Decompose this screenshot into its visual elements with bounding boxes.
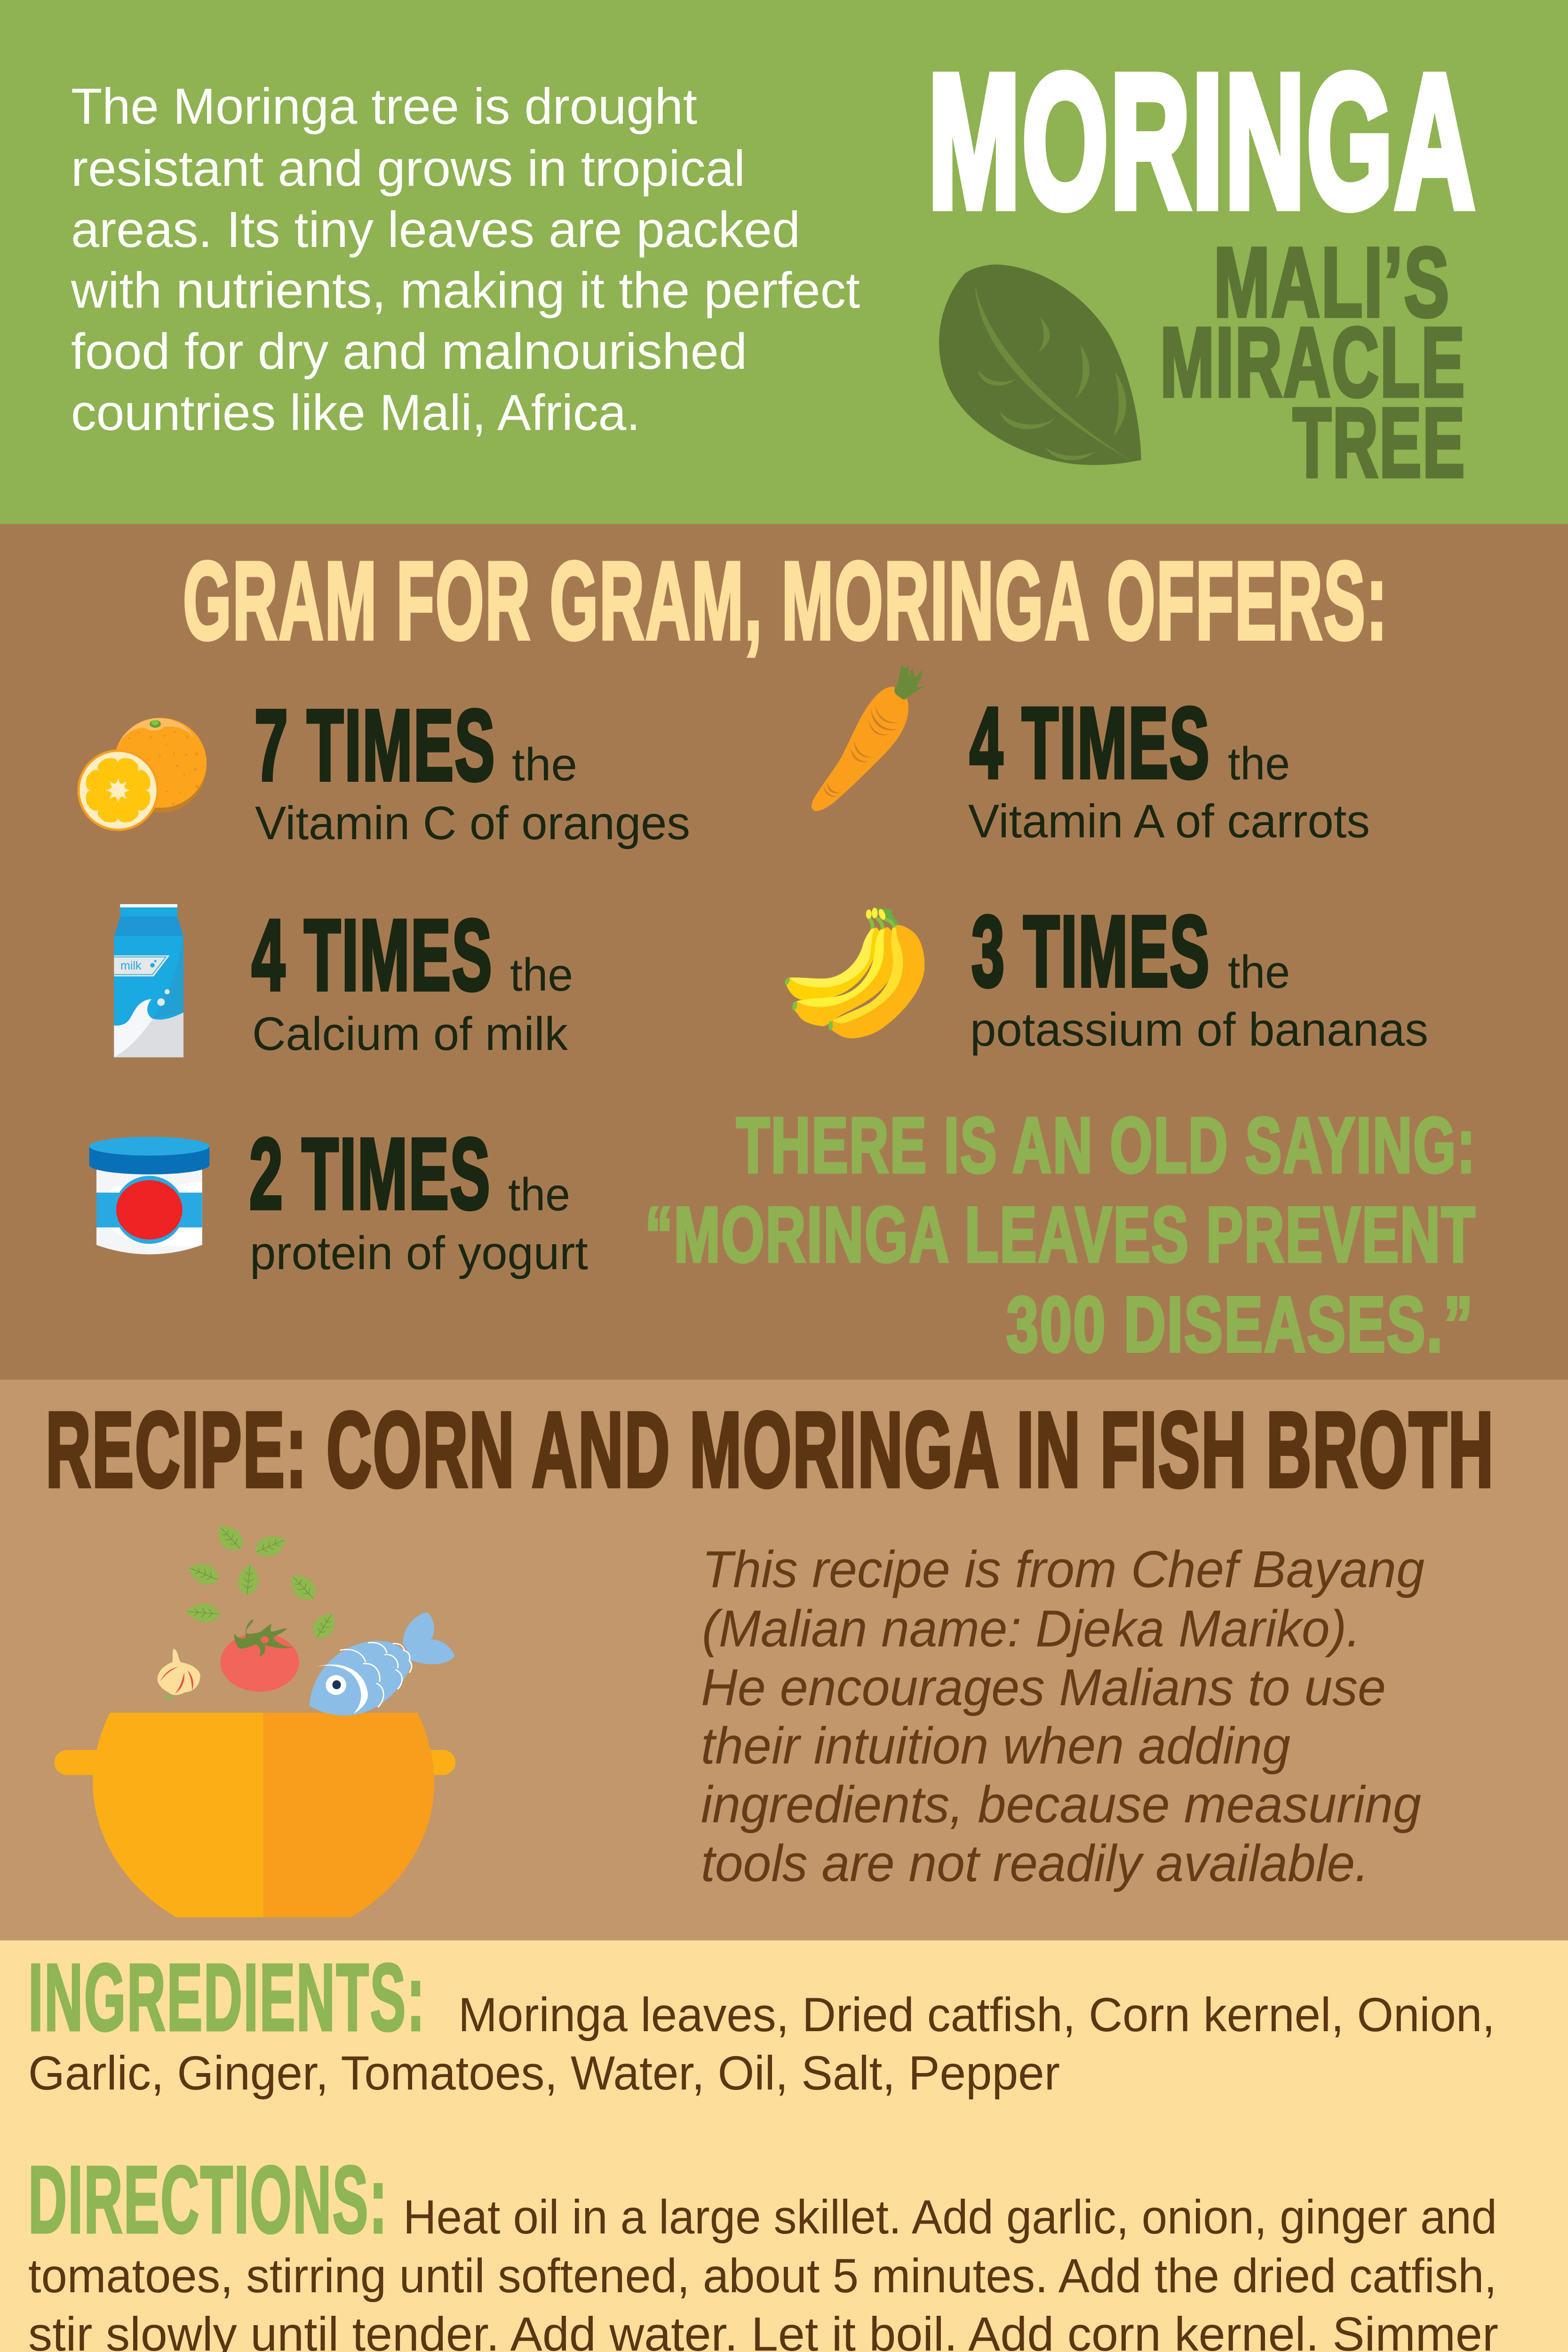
icon: bananas [784,908,924,1038]
ingredients list [28,1988,1495,2100]
recipe paragraph [701,1541,1425,1892]
icon: pot [55,1713,455,1917]
intro paragraph: with nutrients, making it the perfect [71,262,860,318]
icon: milk carton: milk [120,959,142,972]
icon: orange [77,718,207,831]
intro paragraph: resistant and grows in tropical [71,140,745,197]
icon: yogurt [89,1137,209,1255]
directions text: Heat oil in a large skillet. Add garlic, onion, ginger and [403,2190,1497,2244]
intro paragraph: areas. Its tiny leaves are packed [71,201,800,258]
text: the: the [1228,738,1290,789]
text: 4 times: 4 TIMES [970,687,1210,799]
ingredients list: Moringa leaves, Dried catfish, Corn kernel, Onion, [458,1988,1495,2042]
icon: carrot [812,665,926,811]
directions text [28,2190,1498,2352]
icon: milk carton [114,904,183,1057]
fact: vitamin A [812,665,1370,848]
text: 3 times: 3 TIMES [971,895,1210,1008]
recipe paragraph: (Malian name: Djeka Mariko). [702,1600,1361,1658]
text: vitamin A of carrots: Vitamin A of carrots [968,795,1370,848]
fact: potassium [784,895,1428,1056]
directions text: tomatoes, stirring until softened, about 5 minutes. Add the dried catfish, [28,2249,1497,2303]
subtitle: TREE [1293,388,1466,498]
recipe paragraph: ingredients, because measuring [701,1776,1421,1834]
fact: calcium [114,899,573,1060]
text: the: the [510,949,573,1001]
recipe paragraph: He encourages Malians to use [701,1659,1386,1716]
ingredients list: Garlic, Ginger, Tomatoes, Water, Oil, Salt, Pepper [28,2046,1060,2100]
subtitle [1160,228,1466,498]
heading: ingredients: INGREDIENTS: [28,1944,426,2051]
text: potassium of bananas: potassium of bananas [970,1003,1428,1056]
text: 7 times: 7 TIMES [255,689,496,802]
recipe paragraph: their intuition when adding [701,1717,1290,1775]
text: vitamin C of oranges: Vitamin C of oranges [255,797,690,850]
icon: moringa leaf [939,264,1141,465]
recipe paragraph: tools are not readily available. [701,1835,1369,1892]
callout: old saying [645,1102,1476,1368]
icon: garlic [158,1649,200,1700]
intro paragraph: countries like Mali, Africa. [71,384,640,441]
subtitle: MALI’S [1214,228,1450,337]
fact: vitamin C [77,689,690,850]
illustration: cooking pot with ingredients [55,1520,455,1917]
intro paragraph: The Moringa tree is drought [71,78,697,135]
panel: intro [0,0,1568,524]
text: protein of yogurt: protein of yogurt [250,1227,588,1279]
icon: moringa leaves [184,1520,341,1643]
text: 2 times: 2 TIMES [249,1118,491,1230]
intro paragraph [71,78,860,441]
fact: protein [89,1118,588,1279]
text: the: the [508,1168,570,1220]
icon: tomato [221,1619,299,1692]
panel: ingredients and directions [0,1940,1568,2352]
panel: recipe intro [0,1380,1568,1940]
icon: fish [309,1612,455,1716]
intro paragraph: food for dry and malnourished [71,323,747,380]
heading: directions: DIRECTIONS: [28,2146,388,2253]
text: calcium of milk: Calcium of milk [252,1008,568,1060]
panel: nutrition comparison [0,524,1568,1380]
text: the: the [1228,946,1290,998]
recipe paragraph: This recipe is from Chef Bayang [702,1541,1425,1598]
text: the: the [512,739,577,790]
text: 4 times: 4 TIMES [252,899,493,1011]
